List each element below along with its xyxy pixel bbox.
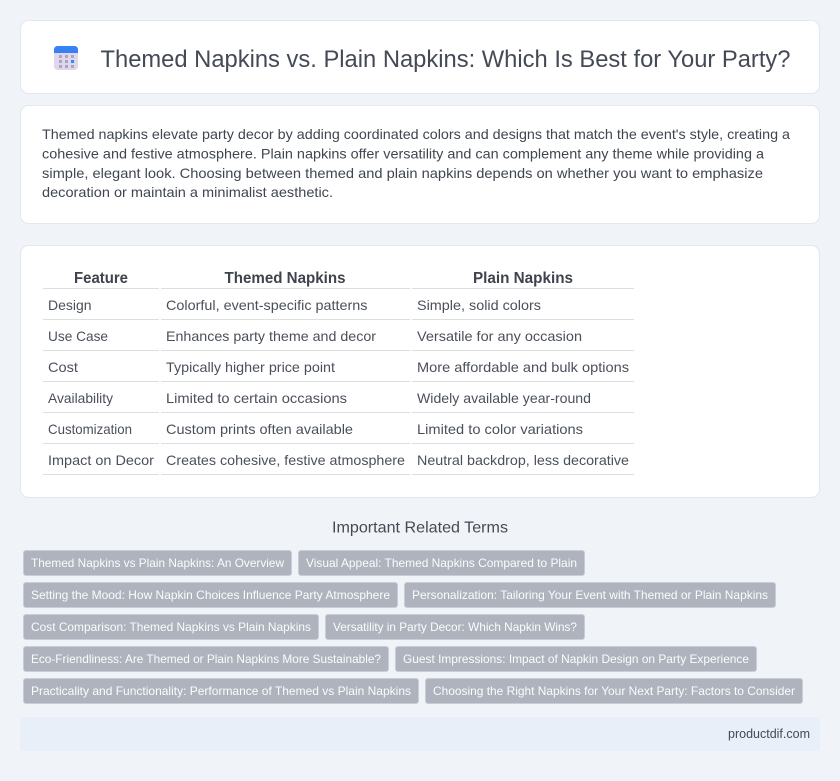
tag: Cost Comparison: Themed Napkins vs Plain Napkins: [31, 620, 311, 634]
row: impact on decor: [48, 452, 629, 468]
row: customization: Limited to color variations: [417, 421, 583, 437]
tag: Setting the Mood: How Napkin Choices Influence Party Atmosphere: [31, 588, 390, 602]
tag: [24, 646, 388, 672]
panel: intro paragraph: Themed napkins elevate party decor by adding coordinated colors and designs that match the event's style, creating a: [42, 126, 790, 142]
row: customization: Customization: [48, 421, 132, 437]
row: customization: [48, 421, 583, 437]
title: Themed Napkins vs. Plain Napkins: Which Is Best for Your Party?: [100, 46, 790, 73]
panel: intro paragraph: decoration or maintain a minimalist aesthetic.: [42, 184, 333, 200]
row: cost: More affordable and bulk options: [417, 359, 629, 375]
heading: related terms: Important Related Terms: [332, 520, 508, 536]
row: cost: [48, 359, 629, 375]
tag: Eco-Friendliness: Are Themed or Plain Napkins More Sustainable?: [31, 652, 381, 666]
tag: [24, 582, 398, 608]
row: design: [48, 297, 541, 313]
footer: [20, 717, 820, 751]
panel: comparison table: [20, 246, 820, 498]
row: availability: Availability: [48, 390, 113, 406]
row: impact on decor: Creates cohesive, festive atmosphere: [166, 452, 405, 468]
tag: Personalization: Tailoring Your Event with Themed or Plain Napkins: [412, 588, 768, 602]
row: design: Colorful, event-specific patterns: [166, 297, 368, 313]
panel: intro paragraph: [20, 106, 820, 224]
table header: Plain Napkins: [473, 270, 573, 287]
table header: [74, 270, 573, 287]
tag: [24, 678, 418, 704]
row: impact on decor: Neutral backdrop, less decorative: [417, 452, 629, 468]
tag: [396, 646, 756, 672]
panel: intro paragraph: cohesive and festive atmosphere. Plain napkins offer versatility and can complement any theme while providing a: [42, 146, 764, 162]
tag: Practicality and Functionality: Performance of Themed vs Plain Napkins: [31, 684, 411, 698]
row: use case: [48, 328, 582, 344]
panel: intro paragraph: simple, elegant look. Choosing between themed and plain napkins depends on whether you want to emphasize: [42, 165, 763, 181]
tag: Themed Napkins vs Plain Napkins: An Overview: [31, 556, 284, 570]
header panel: [20, 20, 820, 94]
tag: Versatility in Party Decor: Which Napkin Wins?: [333, 620, 577, 634]
icon: calendar: [54, 46, 78, 70]
row: cost: Typically higher price point: [166, 359, 335, 375]
tag: [24, 614, 318, 640]
row: availability: [48, 390, 591, 406]
table header: Feature: [74, 270, 128, 287]
tag: [426, 678, 802, 704]
related term tags: [24, 550, 802, 704]
row: design: Simple, solid colors: [417, 297, 541, 313]
tag: [298, 550, 584, 576]
footer: productdif.com: [728, 727, 810, 741]
row: customization: Custom prints often available: [166, 421, 353, 437]
row: impact on decor: Impact on Decor: [48, 452, 154, 468]
row: use case: Enhances party theme and decor: [166, 328, 376, 344]
table header: Themed Napkins: [224, 270, 346, 287]
tag: [404, 582, 776, 608]
row: use case: Versatile for any occasion: [417, 328, 582, 344]
tag: Guest Impressions: Impact of Napkin Design on Party Experience: [403, 652, 749, 666]
row: design: Design: [48, 297, 92, 313]
tag: Visual Appeal: Themed Napkins Compared to Plain: [306, 556, 577, 570]
row: use case: Use Case: [48, 328, 108, 344]
tag: [24, 550, 292, 576]
row: cost: Cost: [48, 359, 78, 375]
row: availability: Widely available year-round: [417, 390, 591, 406]
tag: Choosing the Right Napkins for Your Next Party: Factors to Consider: [433, 684, 795, 698]
tag: [326, 614, 584, 640]
row: availability: Limited to certain occasions: [166, 390, 347, 406]
